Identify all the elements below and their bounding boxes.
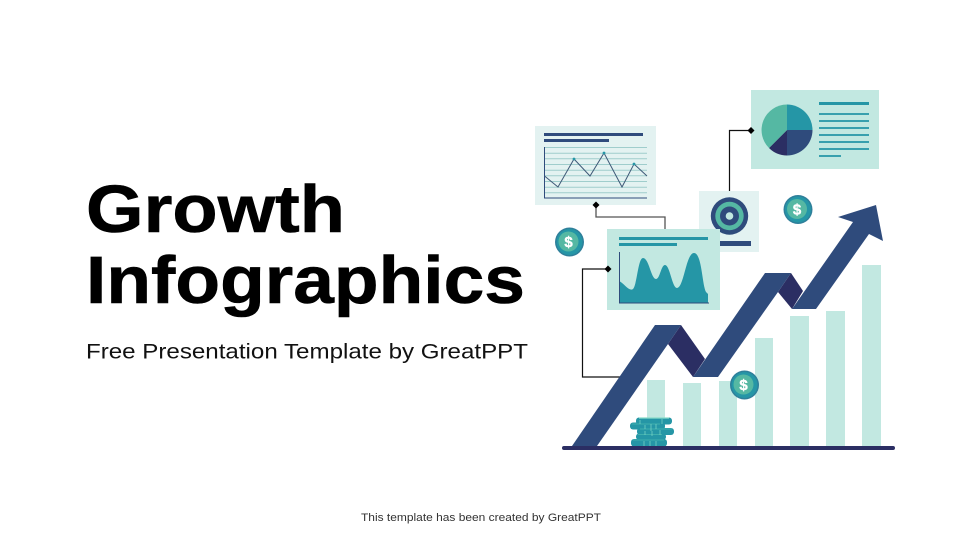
icon: dollar coin top right — [784, 195, 812, 224]
connector: target to pie panel — [730, 130, 751, 191]
growth arrow — [572, 205, 883, 446]
panel: target — [699, 191, 759, 252]
panel: line chart — [535, 126, 656, 205]
connector: line chart to area chart — [596, 205, 665, 229]
icon: dollar coin left: $ — [564, 234, 573, 251]
title: Infographics — [86, 243, 525, 318]
connector: area chart to arrow — [582, 269, 620, 377]
coin stack — [630, 418, 674, 448]
title: Growth — [86, 172, 345, 247]
subtitle: Free Presentation Template by GreatPPT — [86, 340, 528, 364]
panel: area chart — [607, 229, 720, 310]
diamond markers — [592, 127, 754, 272]
icon: dollar coin left — [555, 228, 584, 256]
icon: dollar coin centre: $ — [739, 377, 748, 394]
icon: dollar coin centre — [730, 370, 759, 400]
icon: dollar coin top right: $ — [793, 202, 802, 218]
bar chart — [647, 265, 881, 447]
panel: pie chart — [751, 90, 879, 169]
title — [86, 172, 525, 318]
baseline — [562, 446, 895, 450]
footer credit: This template has been created by GreatPPT — [361, 512, 601, 524]
